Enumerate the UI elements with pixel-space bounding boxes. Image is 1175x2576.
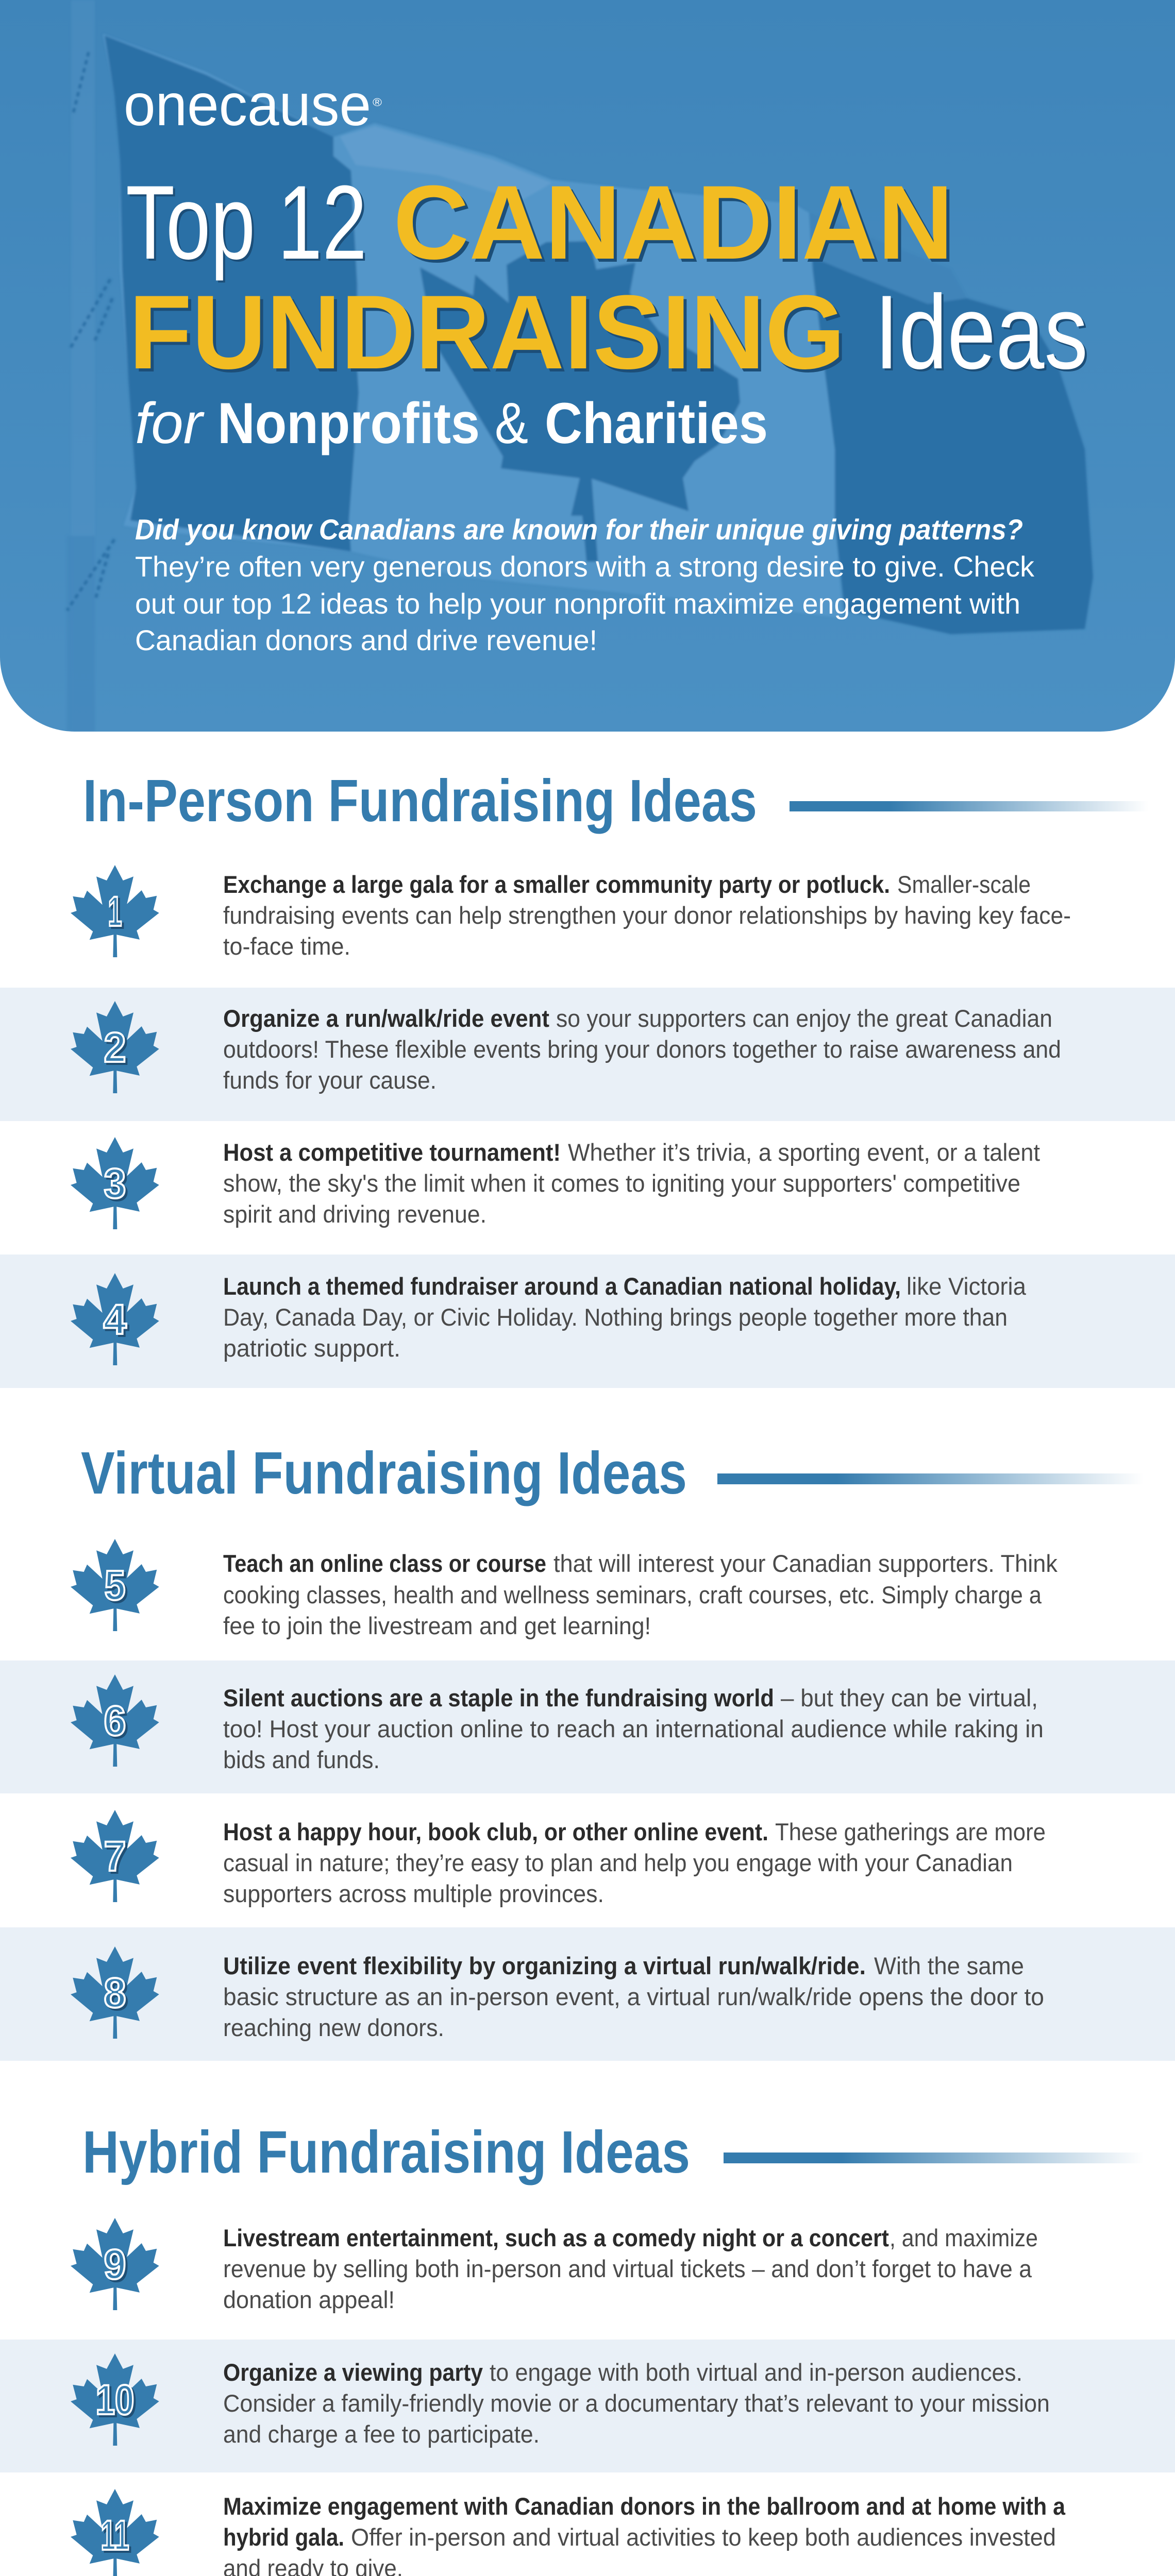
text block 7 (223, 1818, 1046, 1907)
icon: maple leaf 9 (71, 2218, 159, 2310)
text block 6: too! Host your auction online to reach an international audience while raking in (223, 1715, 1044, 1742)
icon: maple leaf 4: 4 (103, 1296, 127, 1343)
text block 4: like Victoria (907, 1273, 1027, 1300)
text block 8: With the same (874, 1952, 1024, 1979)
icon: maple leaf 2 (71, 1001, 159, 1093)
text block 1: to-face time. (223, 933, 350, 960)
text block 6: – but they can be virtual, (781, 1684, 1038, 1711)
title: CANADIAN (393, 164, 953, 281)
intro text: They’re often very generous donors with a strong desire to give. Check (135, 550, 1035, 583)
hero background (0, 0, 1175, 732)
text block 6: bids and funds. (223, 1746, 380, 1773)
row band 10 (0, 2340, 1175, 2472)
text block 9: revenue by selling both in-person and virtual tickets – and don’t forget to have a (223, 2255, 1032, 2282)
row band 6 (0, 1660, 1175, 1793)
idea 6 (0, 1660, 1175, 1793)
subtitle: & (495, 391, 528, 455)
text block 5: fee to join the livestream and get learning! (223, 1612, 651, 1639)
text block 7: supporters across multiple provinces. (223, 1880, 604, 1907)
text block 10 (223, 2359, 1050, 2448)
text block 4: patriotic support. (223, 1334, 400, 1362)
row band 4 (0, 1255, 1175, 1388)
text block 3: spirit and driving revenue. (223, 1200, 486, 1228)
subtitle: Charities (545, 391, 768, 455)
text block 3: Whether it’s trivia, a sporting event, or a talent (568, 1139, 1040, 1166)
text block 8: basic structure as an in-person event, a virtual run/walk/ride opens the door to (223, 1983, 1044, 2010)
icon: maple leaf 6 (71, 1674, 159, 1767)
icon: maple leaf 6: 6 (104, 1698, 126, 1744)
subtitle: for (135, 391, 205, 455)
text block 6: Silent auctions are a staple in the fundraising world (223, 1684, 774, 1711)
text block 5: cooking classes, health and wellness seminars, craft courses, etc. Simply charge a (223, 1581, 1042, 1608)
subtitle: Nonprofits (217, 391, 480, 455)
heading bar (724, 2153, 1144, 2163)
text block 5 (223, 1550, 1058, 1639)
heading bar (717, 1473, 1144, 1484)
text block 11: hybrid gala. (223, 2523, 344, 2551)
logo: onecause: ® (373, 96, 382, 109)
icon: maple leaf 3: 3 (104, 1160, 126, 1207)
icon: maple leaf 3 (71, 1137, 159, 1229)
icon: maple leaf 1: 1 (108, 888, 122, 935)
text block 7: Host a happy hour, book club, or other online event. (223, 1818, 768, 1845)
icon: maple leaf 9: 9 (104, 2241, 126, 2288)
idea 9 (71, 2218, 1038, 2313)
heading: Virtual Fundraising Ideas: Virtual Fundraising Ideas (81, 1439, 687, 1506)
row band 2 (0, 988, 1175, 1121)
text block 2: Organize a run/walk/ride event (223, 1005, 549, 1032)
idea 1 (71, 865, 1071, 960)
intro text: Canadian donors and drive revenue! (135, 624, 597, 656)
icon: maple leaf 5: 5 (104, 1562, 126, 1609)
heading: In-Person Fundraising Ideas: In-Person Fundraising Ideas (83, 767, 757, 834)
text block 9: Livestream entertainment, such as a comedy night or a concert (223, 2224, 889, 2251)
section: in-person ideas (0, 767, 1175, 1388)
text block 10: Organize a viewing party (223, 2359, 483, 2386)
intro text: out our top 12 ideas to help your nonprofit maximize engagement with (135, 587, 1020, 620)
icon: maple leaf 7 (71, 1810, 159, 1902)
text block 8 (223, 1952, 1044, 2041)
text block 3: show, the sky's the limit when it comes to igniting your supporters' competitive (223, 1170, 1020, 1197)
text block 6 (223, 1684, 1044, 1773)
text block 10: Consider a family-friendly movie or a documentary that’s relevant to your mission (223, 2389, 1050, 2417)
text block 2 (223, 1005, 1061, 1094)
text block 3: Host a competitive tournament! (223, 1139, 561, 1166)
text block 11 (223, 2493, 1066, 2576)
idea 3 (71, 1137, 1040, 1229)
idea 7 (71, 1810, 1046, 1907)
icon: maple leaf 7: 7 (104, 1833, 126, 1880)
logo: onecause: onecause (124, 72, 371, 138)
text block 9: donation appeal! (223, 2286, 395, 2313)
section: virtual ideas (0, 1439, 1175, 2061)
heading bar (790, 801, 1149, 811)
text block 2: funds for your cause. (223, 1066, 437, 1094)
text block 5: that will interest your Canadian supporters. Think (553, 1550, 1058, 1577)
text block 4: Day, Canada Day, or Civic Holiday. Nothing brings people together more than (223, 1303, 1008, 1331)
text block 5: Teach an online class or course (223, 1550, 546, 1577)
icon: maple leaf 11: 11 (100, 2512, 129, 2559)
text block 4 (223, 1273, 1027, 1362)
text block 1: fundraising events can help strengthen your donor relationships by having key face- (223, 902, 1071, 929)
text block 9 (223, 2224, 1038, 2313)
text block 7: casual in nature; they’re easy to plan and help you engage with your Canadian (223, 1849, 1013, 1876)
text block 10: and charge a fee to participate. (223, 2420, 540, 2448)
icon: maple leaf 4 (71, 1273, 159, 1365)
text block 8: Utilize event flexibility by organizing a virtual run/walk/ride. (223, 1952, 866, 1979)
text block 2: so your supporters can enjoy the great Canadian (556, 1005, 1052, 1032)
title: FUNDRAISING (129, 274, 845, 391)
subtitle (135, 391, 768, 455)
text block 7: These gatherings are more (775, 1818, 1046, 1845)
text block 11: Offer in-person and virtual activities to keep both audiences invested (351, 2523, 1056, 2551)
icon: maple leaf 2: 2 (104, 1024, 126, 1071)
intro text (135, 513, 1035, 656)
icon: maple leaf 1 (71, 865, 159, 957)
idea 5 (71, 1539, 1058, 1639)
text block 3 (223, 1139, 1040, 1228)
title: Ideas (875, 274, 1088, 391)
icon: maple leaf 11 (71, 2489, 159, 2576)
text block 4: Launch a themed fundraiser around a Canadian national holiday, (223, 1273, 901, 1300)
idea 11 (71, 2489, 1066, 2576)
icon: maple leaf 10: 10 (96, 2377, 134, 2424)
text block 10: to engage with both virtual and in-person audiences. (490, 2359, 1022, 2386)
title: Top 12 (126, 164, 367, 281)
intro text: Did you know Canadians are known for their unique giving patterns? (135, 513, 1023, 546)
icon: maple leaf 8: 8 (104, 1970, 126, 2016)
text block 1: Exchange a large gala for a smaller community party or potluck. (223, 871, 890, 898)
section: hybrid ideas (0, 2119, 1175, 2576)
row band 8 (0, 1927, 1175, 2061)
icon: maple leaf 10 (71, 2353, 159, 2446)
text block 8: reaching new donors. (223, 2014, 444, 2041)
image: Canadian flag on pole (67, 0, 1093, 732)
idea 8 (0, 1927, 1175, 2061)
heading: Hybrid Fundraising Ideas: Hybrid Fundraising Ideas (82, 2119, 690, 2185)
text block 2: outdoors! These flexible events bring your donors together to raise awareness and (223, 1036, 1061, 1063)
idea 2 (0, 988, 1175, 1121)
text block 9: , and maximize (889, 2224, 1038, 2251)
text block 1: Smaller-scale (897, 871, 1031, 898)
idea 4 (0, 1255, 1175, 1388)
text block 11: Maximize engagement with Canadian donors in the ballroom and at home with a (223, 2493, 1066, 2520)
idea 10 (0, 2340, 1175, 2472)
text block 1 (223, 871, 1071, 960)
title (126, 164, 1088, 391)
icon: maple leaf 5 (71, 1539, 159, 1631)
icon: maple leaf 8 (71, 1946, 159, 2039)
panel: hero header (0, 0, 1175, 732)
